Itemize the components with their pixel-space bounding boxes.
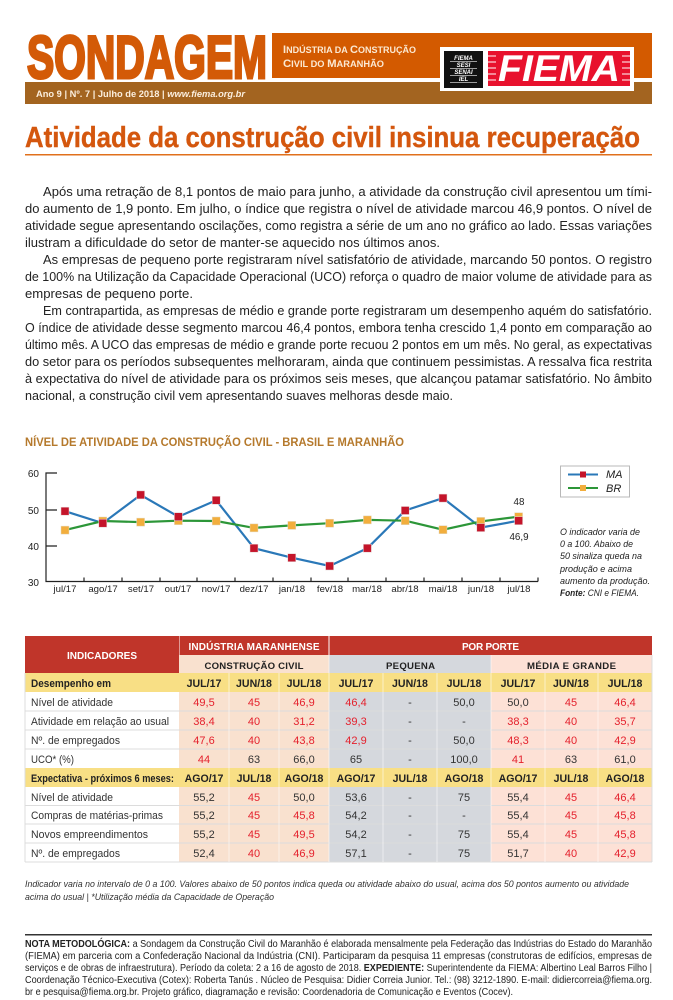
chart note xyxy=(559,527,650,598)
row: UCO: 66,0 xyxy=(293,754,315,766)
row: Nº. de empregados (expectativa): 40 xyxy=(565,848,577,860)
row: UCO xyxy=(31,754,636,766)
body text: Em contrapartida, as empresas de médio e grande porte registraram um desempenho aquém do satisfatório. xyxy=(43,304,652,318)
markers: MA xyxy=(61,491,523,570)
row: Desempenho em xyxy=(31,678,642,690)
subtitle: CIVIL DO MARANHÃO xyxy=(283,58,384,70)
series: BR xyxy=(61,513,523,534)
methodology note: serviços e de obras de infraestrutura). Período da coleta: 2 a 16 de agosto de 2018. EXPEDIENTE: Superintendente da FIEMA: Albertino Leal Barros Filho | xyxy=(25,963,652,974)
row: Novos empreendimentos: 49,5 xyxy=(293,829,315,841)
row: UCO: 61,0 xyxy=(614,754,636,766)
row: Nº. de empregados (expectativa) xyxy=(31,848,636,860)
x axis labels: jul/17 xyxy=(53,584,76,595)
body text: atividade segue apresentando oscilações, como registra a série de um ano no gráfico ao lado. Essas variações xyxy=(25,219,652,233)
row: Atividade em relação ao usual: 35,7 xyxy=(614,716,636,728)
body text xyxy=(25,185,652,403)
data labels xyxy=(509,497,529,543)
row: Nível de atividade: Nível de atividade xyxy=(31,697,113,709)
table footnote: acima do usual | *Utilização média da Capacidade de Operação xyxy=(25,891,274,902)
row: Novos empreendimentos xyxy=(31,829,636,841)
logo: FIEMA: SESI xyxy=(457,63,471,69)
logo: FIEMA: FIEMA xyxy=(454,56,473,62)
table backgrounds xyxy=(25,692,179,862)
y axis labels: 60 xyxy=(28,469,39,480)
table headers: INDICADORES xyxy=(67,651,137,662)
row: Nº. de empregados: 42,9 xyxy=(614,735,636,747)
row: Nível de atividade (expectativa): 46,4 xyxy=(614,792,636,804)
row: Compras de matérias-primas: 55,2 xyxy=(193,810,215,822)
row: Expectativa: AGO/17 xyxy=(185,773,224,785)
row: Nível de atividade: 46,4 xyxy=(345,697,367,709)
x axis labels: fev/18 xyxy=(317,584,343,595)
x axis labels: set/17 xyxy=(128,584,154,595)
row: Nº. de empregados: Nº. de empregados xyxy=(31,735,120,747)
row: Novos empreendimentos: 45 xyxy=(248,829,260,841)
row: UCO: 63 xyxy=(248,754,260,766)
row: Nº. de empregados (expectativa): 40 xyxy=(248,848,260,860)
table headers xyxy=(67,640,617,672)
row: Nível de atividade: 50,0 xyxy=(453,697,475,709)
table headers: CONSTRUÇÃO CIVIL xyxy=(204,661,304,672)
row: Novos empreendimentos: 75 xyxy=(458,829,470,841)
chart legend xyxy=(560,466,630,497)
row: Desempenho em: JUL/18 xyxy=(447,678,481,690)
row: Novos empreendimentos: 45,8 xyxy=(614,829,636,841)
row: Nº. de empregados (expectativa): 46,9 xyxy=(293,848,315,860)
chart note: aumento da produção. xyxy=(560,576,650,586)
x axis labels: mar/18 xyxy=(352,584,382,595)
row: Nº. de empregados (expectativa): - xyxy=(408,848,412,860)
row: Compras de matérias-primas: Compras de matérias-primas xyxy=(31,810,163,822)
row: Nº. de empregados: 42,9 xyxy=(345,735,367,747)
row: Nº. de empregados xyxy=(31,735,636,747)
data labels: 48 xyxy=(514,497,525,508)
row: UCO: - xyxy=(408,754,412,766)
row: Atividade em relação ao usual: 39,3 xyxy=(345,716,367,728)
row: Expectativa: AGO/18 xyxy=(606,773,645,785)
body text: Após uma retração de 8,1 pontos de maio para junho, a atividade da construção civil apresentou um tími- xyxy=(43,185,652,199)
row: Atividade em relação ao usual: 38,3 xyxy=(507,716,529,728)
row: Nível de atividade: 45 xyxy=(248,697,260,709)
row: Nº. de empregados: 43,8 xyxy=(293,735,315,747)
body text: nacional, a construção civil vem apresentando suaves melhoras desde maio. xyxy=(25,389,453,403)
row: Nº. de empregados (expectativa): 57,1 xyxy=(345,848,367,860)
row: Desempenho em: JUL/18 xyxy=(287,678,321,690)
row: Nível de atividade: 46,4 xyxy=(614,697,636,709)
row: Nível de atividade: 45 xyxy=(565,697,577,709)
table headers: MÉDIA E GRANDE xyxy=(527,660,617,672)
x axis labels: dez/17 xyxy=(240,584,268,595)
chart heading: NÍVEL DE ATIVIDADE DA CONSTRUÇÃO CIVIL - BRASIL E MARANHÃO xyxy=(25,436,404,449)
row: Nº. de empregados (expectativa): 42,9 xyxy=(614,848,636,860)
row: UCO: 41 xyxy=(512,754,524,766)
row: Novos empreendimentos: 55,4 xyxy=(507,829,529,841)
row: Expectativa: AGO/18 xyxy=(445,773,484,785)
data labels: 46,9 xyxy=(509,532,529,543)
subtitle xyxy=(283,44,416,70)
data table xyxy=(25,636,652,862)
row: UCO: 65 xyxy=(350,754,362,766)
masthead xyxy=(25,24,652,104)
row: Expectativa xyxy=(31,773,645,785)
row: Desempenho em: JUN/18 xyxy=(392,678,428,690)
row: Compras de matérias-primas: 45,8 xyxy=(614,810,636,822)
x axis labels: jun/18 xyxy=(467,584,494,595)
row: Nível de atividade (expectativa): 45 xyxy=(248,792,260,804)
row: UCO: UCO* (%) xyxy=(31,754,74,766)
x axis labels: out/17 xyxy=(165,584,191,595)
row: Nível de atividade (expectativa): 53,6 xyxy=(345,792,367,804)
body text: à expectativa do nível de atividade para os próximos seis meses, que alcançou patamar satisfatório. No âmbito xyxy=(25,372,652,386)
chart note: O indicador varia de xyxy=(560,527,640,537)
axes xyxy=(46,473,538,582)
row: Expectativa: JUL/18 xyxy=(237,773,271,785)
body text: empresas de pequeno porte. xyxy=(25,287,193,301)
table footnote xyxy=(25,878,629,902)
table footnote: Indicador varia no intervalo de 0 a 100. Valores abaixo de 50 pontos indica queda ou atividade abaixo do usual, acima dos 50 pontos aumento ou atividade xyxy=(25,878,629,889)
brown issue band xyxy=(25,82,652,104)
x axis labels: ago/17 xyxy=(88,584,118,595)
logo: FIEMA: FIEMA xyxy=(498,48,620,89)
row: Nº. de empregados: 50,0 xyxy=(453,735,475,747)
chart note: 0 a 100. Abaixo de xyxy=(560,539,633,549)
table headers: PEQUENA xyxy=(386,661,435,672)
issue line: Ano 9 | Nº. 7 | Julho de 2018 | www.fiema.org.br xyxy=(36,88,246,99)
subtitle: INDÚSTRIA DA CONSTRUÇÃO xyxy=(283,44,416,56)
row: Nº. de empregados: - xyxy=(408,735,412,747)
y axis labels xyxy=(28,469,39,589)
x axis labels: jan/18 xyxy=(278,584,305,595)
row: Atividade em relação ao usual: 40 xyxy=(248,716,260,728)
row: Desempenho em: Desempenho em xyxy=(31,678,111,690)
x axis labels: jul/18 xyxy=(507,584,530,595)
row: Expectativa: JUL/18 xyxy=(393,773,427,785)
row: Nível de atividade (expectativa): 50,0 xyxy=(293,792,315,804)
row: Nº. de empregados: 40 xyxy=(248,735,260,747)
row: Novos empreendimentos: - xyxy=(408,829,412,841)
row: Compras de matérias-primas: 54,2 xyxy=(345,810,367,822)
row: Nível de atividade xyxy=(31,697,636,709)
y axis labels: 40 xyxy=(28,542,39,553)
row: Nível de atividade (expectativa): 55,4 xyxy=(507,792,529,804)
body text: do aumento de 1,9 ponto. Em julho, o índice que registra o nível de atividade marcou 46,9 pontos. O nível de xyxy=(25,202,652,216)
body text: do setor para os períodos subsequentes melhoraram, ainda que continuem pessimistas. A ressalva fica restrita xyxy=(25,355,652,369)
body text: de 100% na Utilização da Capacidade Operacional (UCO) reforça o quadro de maior volume de atividade para as xyxy=(25,270,652,284)
row: Nível de atividade (expectativa): 55,2 xyxy=(193,792,215,804)
row: Atividade em relação ao usual: 40 xyxy=(565,716,577,728)
row: UCO: 100,0 xyxy=(450,754,478,766)
row: Nível de atividade: - xyxy=(408,697,412,709)
row: Compras de matérias-primas: 45,8 xyxy=(293,810,315,822)
row: Nível de atividade (expectativa) xyxy=(31,792,636,804)
row: Atividade em relação ao usual: - xyxy=(408,716,412,728)
row: Novos empreendimentos: Novos empreendimentos xyxy=(31,829,148,841)
row: Nível de atividade (expectativa): - xyxy=(408,792,412,804)
row: Desempenho em: JUN/18 xyxy=(236,678,272,690)
row: Compras de matérias-primas: 45 xyxy=(565,810,577,822)
row: Nº. de empregados (expectativa): 75 xyxy=(458,848,470,860)
row: Desempenho em: JUL/18 xyxy=(608,678,642,690)
methodology note xyxy=(25,934,653,998)
row: Novos empreendimentos: 55,2 xyxy=(193,829,215,841)
row: Desempenho em: JUL/17 xyxy=(501,678,535,690)
row: Novos empreendimentos: 54,2 xyxy=(345,829,367,841)
row: Atividade em relação ao usual: 38,4 xyxy=(193,716,215,728)
row: Nº. de empregados: 47,6 xyxy=(193,735,215,747)
row: Desempenho em: JUL/17 xyxy=(339,678,373,690)
table headers: POR PORTE xyxy=(462,642,519,653)
row: Atividade em relação ao usual: Atividade em relação ao usual xyxy=(31,716,169,728)
body text: último mês. A UCO das empresas de médio e grande porte recuou 2 pontos em um mês. No geral, as expectativas xyxy=(25,338,652,352)
row: Desempenho em: JUL/17 xyxy=(187,678,221,690)
x axis labels: abr/18 xyxy=(391,584,419,595)
row: Nível de atividade: 50,0 xyxy=(507,697,529,709)
row: Atividade em relação ao usual: 31,2 xyxy=(293,716,315,728)
orange header band xyxy=(272,33,652,78)
row: Nº. de empregados (expectativa): Nº. de empregados xyxy=(31,848,120,860)
y axis labels: 50 xyxy=(28,506,39,517)
body text: O índice de atividade desse segmento marcou 46,4 pontos, embora tenha crescido 1,4 ponto em comparação ao xyxy=(25,321,652,335)
x axis labels xyxy=(53,584,530,595)
logo: FIEMA xyxy=(440,47,634,91)
chart legend: BR xyxy=(606,483,621,495)
row: Expectativa: AGO/18 xyxy=(285,773,324,785)
body text: ilustram a dificuldade do setor de manter-se aquecido nos últimos anos. xyxy=(25,236,440,250)
y axis labels: 30 xyxy=(28,578,39,589)
body text: As empresas de pequeno porte registraram nível satisfatório de atividade, marcando 50 pontos. O registro xyxy=(43,253,652,267)
logo: FIEMA: IEL xyxy=(459,77,468,83)
row: UCO: 44 xyxy=(198,754,210,766)
row: Compras de matérias-primas: - xyxy=(462,810,466,822)
row: Compras de matérias-primas: - xyxy=(408,810,412,822)
row: Nível de atividade (expectativa): 75 xyxy=(458,792,470,804)
row: UCO: 63 xyxy=(565,754,577,766)
row: Expectativa: Expectativa - próximos 6 meses: xyxy=(31,773,174,785)
row: Atividade em relação ao usual: - xyxy=(462,716,466,728)
row: Nível de atividade: 49,5 xyxy=(193,697,215,709)
row: Nível de atividade: 46,9 xyxy=(293,697,315,709)
x axis labels: mai/18 xyxy=(429,584,457,595)
title: SONDAGEM: SONDAGEM xyxy=(27,24,267,91)
row: Nº. de empregados (expectativa): 51,7 xyxy=(507,848,529,860)
chart legend: MA xyxy=(606,469,622,481)
row: Nível de atividade (expectativa): 45 xyxy=(565,792,577,804)
row: Expectativa: JUL/18 xyxy=(554,773,588,785)
chart note: Fonte: CNI e FIEMA. xyxy=(560,588,639,598)
row: Nº. de empregados (expectativa): 52,4 xyxy=(193,848,215,860)
x axis labels: nov/17 xyxy=(202,584,230,595)
series: MA xyxy=(65,495,519,566)
methodology note: br e pesquisa@fiema.org.br. Projeto gráfico, diagramação e revisão: Coordenadoria de Comunicação e Eventos (Cocev). xyxy=(25,987,513,998)
logo: FIEMA: SENAI xyxy=(454,70,473,76)
chart note: 50 sinaliza queda na xyxy=(560,551,642,561)
row: Compras de matérias-primas: 45 xyxy=(248,810,260,822)
line chart xyxy=(28,469,538,595)
table headers: INDÚSTRIA MARANHENSE xyxy=(188,640,320,653)
row: Desempenho em: JUN/18 xyxy=(553,678,589,690)
row: Compras de matérias-primas xyxy=(31,810,636,822)
row: Nível de atividade (expectativa): Nível de atividade xyxy=(31,792,113,804)
row: Nº. de empregados: 48,3 xyxy=(507,735,529,747)
chart note: produção e acima xyxy=(559,564,632,574)
row: Expectativa: AGO/17 xyxy=(337,773,376,785)
row: Expectativa: AGO/17 xyxy=(499,773,538,785)
row: Atividade em relação ao usual xyxy=(31,716,636,728)
row: Compras de matérias-primas: 55,4 xyxy=(507,810,529,822)
row: Novos empreendimentos: 45 xyxy=(565,829,577,841)
methodology note: (FIEMA) em parceria com a Confederação Nacional da Indústria (CNI). Participaram da pesquisa 11 empresas (construtoras de edifícios, empresas de xyxy=(25,951,653,962)
row: Nº. de empregados: 40 xyxy=(565,735,577,747)
